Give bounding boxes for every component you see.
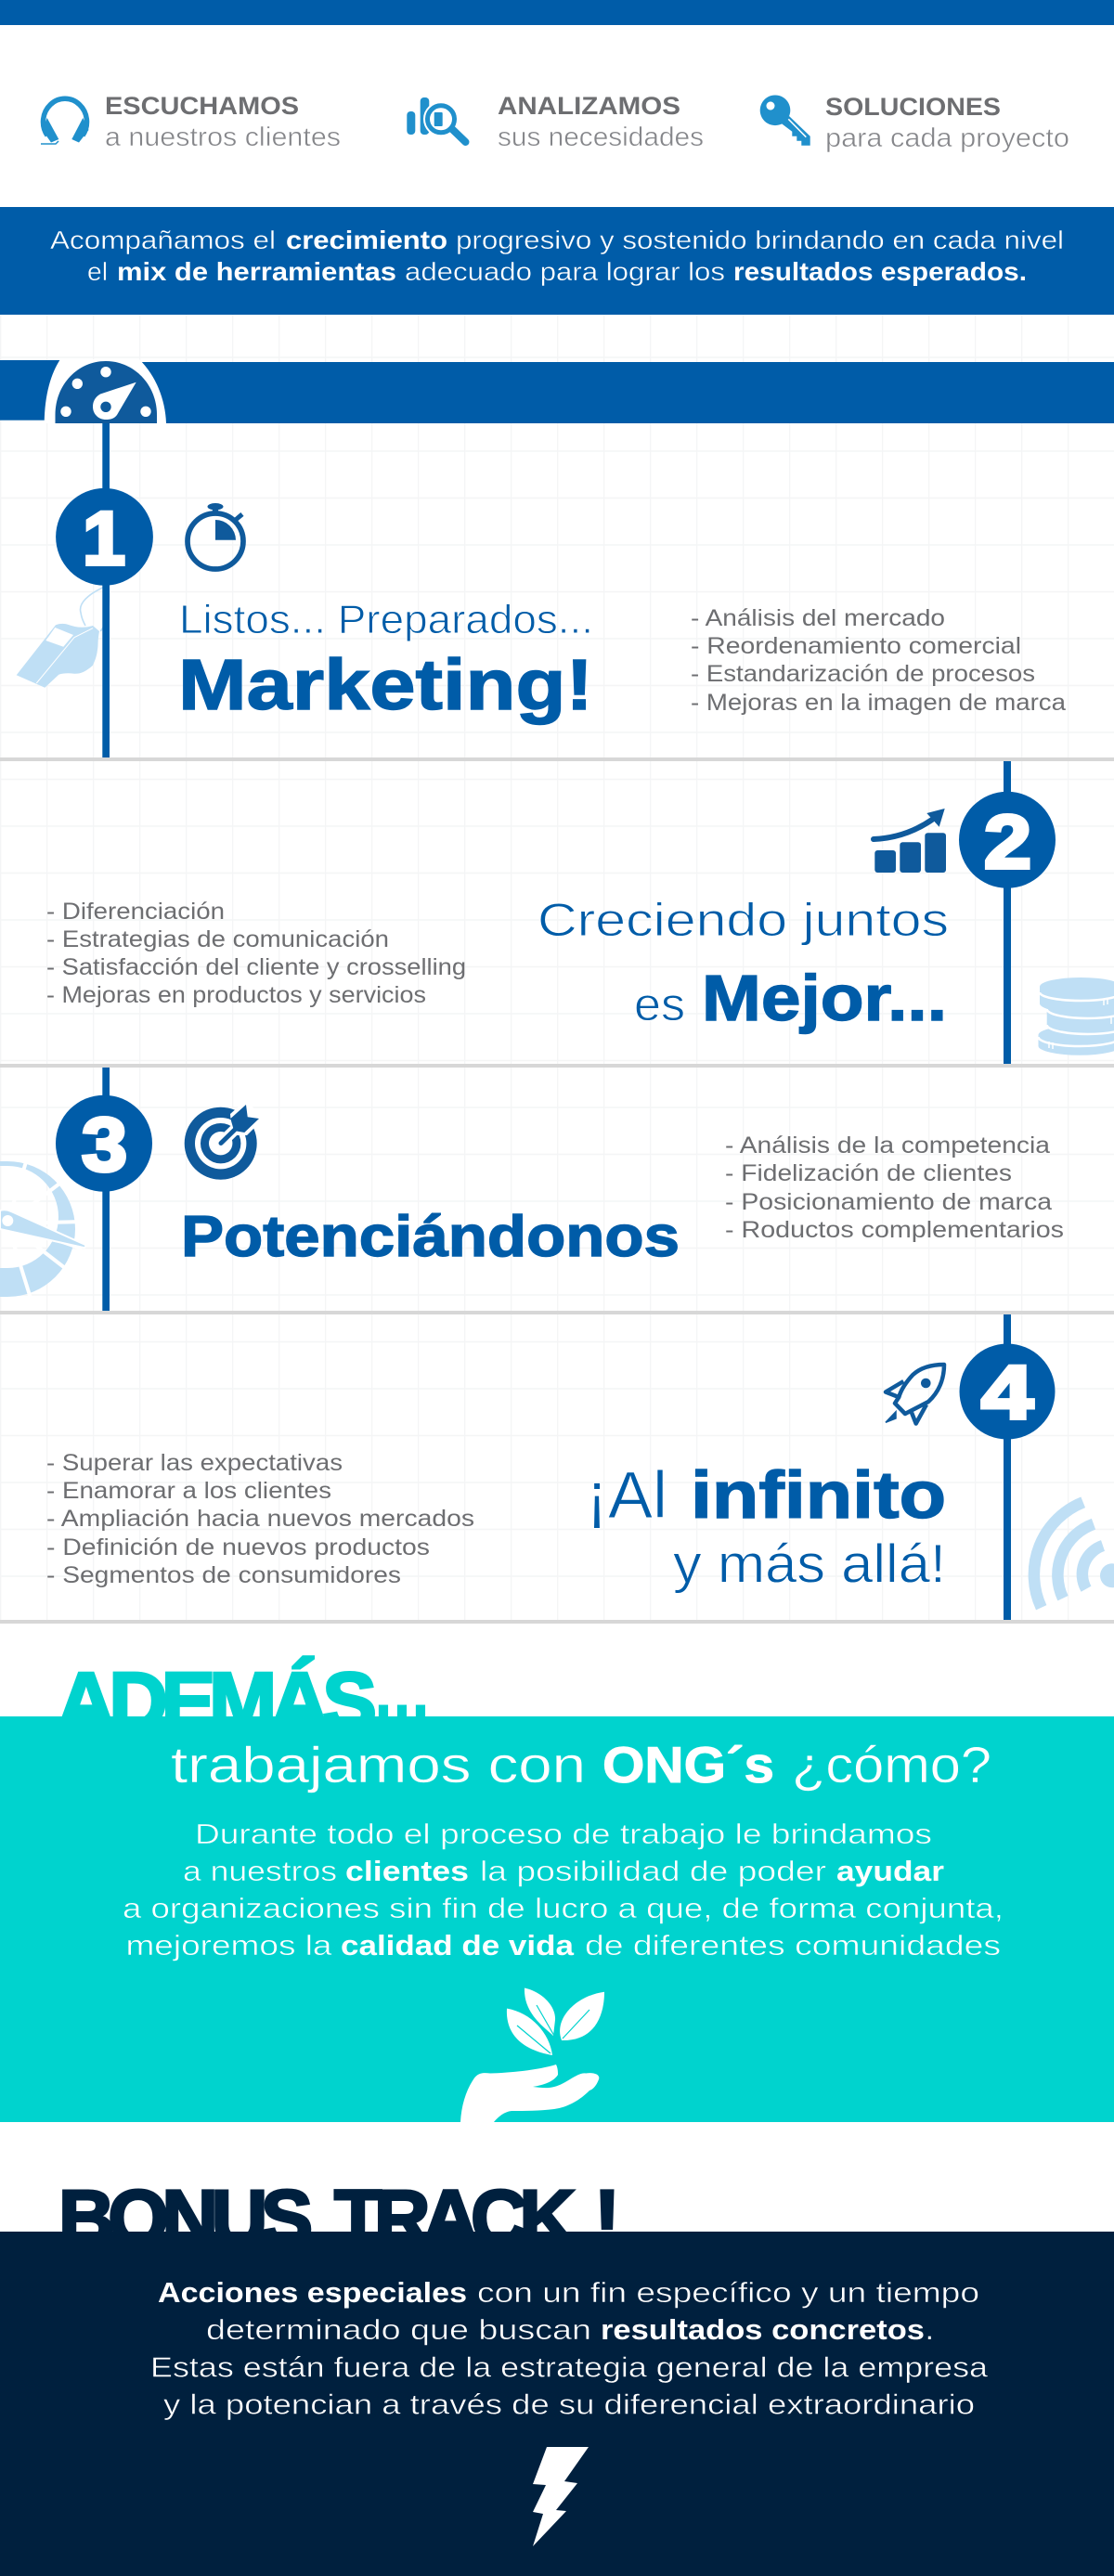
heading: Al infinito: infinito: [691, 1459, 946, 1533]
text block: NGO paragraph: ayudar: [836, 1855, 944, 1887]
number badge 3: [56, 1095, 152, 1192]
panel: step 4: [46, 1314, 1114, 1620]
text block: NGO paragraph: de diferentes comunidades: [585, 1929, 1001, 1961]
heading: Al infinito: [586, 1459, 946, 1533]
list: step 4: - Definición de nuevos productos: [46, 1534, 430, 1560]
icon: key: [760, 95, 810, 146]
heading: Listos: Listos... Preparados...: [179, 597, 593, 642]
icon: target: [185, 1100, 264, 1180]
panel: step 3: [0, 1068, 1064, 1312]
list: step 1: [691, 605, 1066, 716]
timeline line: [102, 423, 110, 757]
heading: es Mejor: es: [634, 978, 685, 1030]
list: step 4: [46, 1450, 474, 1588]
heading: Además: ADEMÁS: [57, 1655, 377, 1747]
list: step 3: - Roductos complementarios: [725, 1217, 1064, 1243]
heading: Bonus track: TRACK: [334, 2174, 576, 2261]
list: step 2: - Satisfacción del cliente y crosselling: [46, 954, 466, 980]
heading: trabajamos con ONG: trabajamos con: [171, 1736, 586, 1793]
item: escuchamos: [105, 92, 341, 152]
panel: bonus section: [0, 2232, 1114, 2576]
icon: coins: [1038, 977, 1114, 1055]
text block: NGO paragraph: calidad de vida: [341, 1929, 575, 1961]
list: step 1: - Estandarización de procesos: [691, 661, 1035, 687]
panel: intro banner: adecuado para lograr los: [405, 257, 725, 286]
icon: stopwatch: [188, 503, 244, 569]
list: step 4: - Ampliación hacia nuevos mercados: [46, 1506, 474, 1532]
number badge 2: 2: [984, 800, 1031, 885]
text block: bonus paragraph: Estas están fuera de la estrategia general de la empresa: [150, 2351, 989, 2384]
item: analizamos: ANALIZAMOS: [498, 92, 680, 120]
list: step 1: - Análisis del mercado: [691, 605, 945, 631]
item: soluciones: [825, 93, 1069, 153]
item: analizamos: sus necesidades: [498, 123, 704, 152]
text block: NGO paragraph: a nuestros: [183, 1855, 337, 1887]
number badge 4: [960, 1344, 1055, 1439]
panel: intro banner: mix de herramientas: [117, 257, 396, 286]
panel: gauge header band: [0, 359, 1114, 423]
heading: Creciendo juntos: Creciendo juntos: [538, 894, 949, 946]
list: step 1: - Mejoras en la imagen de marca: [691, 690, 1066, 716]
heading: Bonus track: BONUS: [58, 2174, 313, 2261]
text block: bonus paragraph: y la potencian a través de su diferencial extraordinario: [163, 2388, 975, 2421]
icon: magnifier over bars: [407, 97, 466, 142]
text block: NGO paragraph: clientes: [345, 1855, 469, 1887]
icon: light wifi signal: [1034, 1502, 1114, 1608]
heading: trabajamos con ONG: ONG´s: [602, 1736, 774, 1793]
list: step 2: [46, 899, 466, 1008]
icon: whistle: [17, 587, 110, 688]
heading: Bonus track: [58, 2174, 620, 2261]
heading: y más allá: y más allá!: [673, 1534, 946, 1595]
text block: NGO paragraph: mejoremos la: [126, 1929, 332, 1961]
panel: intro banner: Acompañamos el: [50, 226, 276, 254]
panel: intro banner: [0, 207, 1114, 315]
list: step 4: - Segmentos de consumidores: [46, 1562, 401, 1588]
timeline line: [102, 1068, 110, 1312]
panel: intro banner: crecimiento: [286, 226, 447, 254]
icon: hand with leaves: [460, 1988, 604, 2122]
item: soluciones: SOLUCIONES: [825, 93, 1001, 121]
heading: es Mejor: Mejor...: [702, 962, 947, 1034]
text block: NGO paragraph: Durante todo el proceso de trabajo le brindamos: [195, 1818, 932, 1850]
text block: NGO paragraph: la posibilidad de poder: [480, 1855, 826, 1887]
number badge 2: [959, 792, 1056, 888]
number badge 1: 1: [83, 497, 125, 581]
list: step 4: - Superar las expectativas: [46, 1450, 343, 1476]
panel: step 1: [17, 423, 1066, 757]
text block: bonus paragraph: resultados concretos: [601, 2313, 925, 2346]
list: step 3: [725, 1133, 1064, 1243]
text block: NGO paragraph: [123, 1818, 1004, 1961]
icon: growth bars: [874, 809, 946, 873]
heading: Potenciándonos: Potenciándonos: [181, 1205, 680, 1269]
list: step 2: - Estrategias de comunicación: [46, 926, 389, 952]
list: step 2: - Diferenciación: [46, 899, 225, 925]
list: step 3: - Posicionamiento de marca: [725, 1189, 1052, 1215]
panel: intro banner: el: [87, 257, 108, 286]
icon: rocket: [886, 1365, 944, 1424]
text block: bonus paragraph: con un fin específico y un tiempo: [477, 2276, 979, 2309]
panel: intro banner: resultados esperados.: [733, 257, 1027, 286]
heading: Bonus track: !: [594, 2174, 620, 2261]
item: soluciones: para cada proyecto: [825, 123, 1069, 153]
heading: trabajamos con ONG: ¿cómo?: [792, 1736, 991, 1793]
panel: three intro items: [41, 92, 1069, 153]
panel: intro banner: progresivo y sostenido brindando en cada nivel: [456, 226, 1064, 254]
number badge 1: [56, 488, 153, 586]
list: step 3: - Fidelización de clientes: [725, 1160, 1012, 1186]
timeline line: [1004, 1314, 1011, 1620]
top bar: [0, 0, 1114, 25]
list: step 2: - Mejoras en productos y servicios: [46, 982, 426, 1008]
text block: bonus paragraph: determinado que buscan: [206, 2313, 591, 2346]
icon: gauge: [56, 361, 157, 423]
panel: NGO section: [0, 1716, 1114, 2122]
text block: NGO paragraph: a organizaciones sin fin de lucro a que, de forma conjunta,: [123, 1892, 1004, 1924]
text block: bonus paragraph: .: [926, 2313, 934, 2346]
panel: step 2: [46, 761, 1114, 1064]
item: analizamos: [498, 92, 704, 152]
item: escuchamos: ESCUCHAMOS: [105, 92, 299, 120]
list: step 1: - Reordenamiento comercial: [691, 633, 1021, 659]
heading: Marketing: Marketing!: [178, 645, 593, 725]
heading: Además: [57, 1628, 430, 1747]
text block: bonus paragraph: Acciones especiales: [158, 2276, 467, 2309]
heading: trabajamos con ONG: [171, 1736, 991, 1793]
icon: lightning bolt: [533, 2447, 589, 2546]
list: step 3: - Análisis de la competencia: [725, 1133, 1050, 1159]
number badge 4: 4: [981, 1351, 1033, 1435]
timeline line: [1004, 761, 1011, 1064]
heading: Al infinito: ¡Al: [586, 1459, 667, 1533]
text block: bonus paragraph: [150, 2276, 989, 2421]
icon: light gauge: [0, 1156, 85, 1304]
icon: headset: [41, 98, 89, 144]
item: escuchamos: a nuestros clientes: [105, 123, 341, 152]
number badge 3: 3: [82, 1103, 127, 1187]
list: step 4: - Enamorar a los clientes: [46, 1478, 331, 1504]
heading: Además: ...: [374, 1628, 430, 1742]
